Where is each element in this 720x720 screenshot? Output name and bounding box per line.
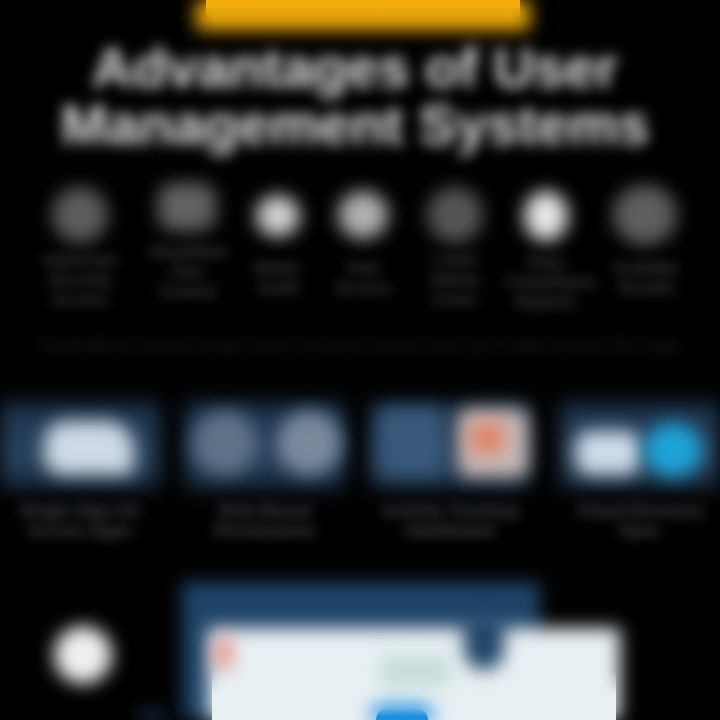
icon 7 — [613, 185, 677, 245]
icon 3 — [256, 195, 300, 237]
blue dial — [368, 704, 436, 720]
panel background — [182, 582, 540, 720]
card 4: Cloud Directory Sync — [576, 501, 704, 540]
notch — [464, 616, 504, 670]
red marker — [216, 638, 232, 668]
caption 7: Scalable Growth — [614, 260, 678, 297]
banner: yellow tag — [181, 0, 545, 46]
card 4 — [548, 390, 720, 542]
caption 2: Simplified User Control — [149, 244, 226, 301]
panel: dashboard preview — [132, 570, 636, 720]
caption 3: Better Audit — [255, 260, 301, 297]
card 3: Activity Tracking Dashboard — [382, 501, 518, 540]
card row: four features — [0, 390, 720, 543]
caption 1: Improved Security Access — [44, 252, 116, 309]
card 3 — [358, 390, 544, 542]
title: Advantages of User — [92, 36, 618, 99]
card 2: Role Based Permissions — [214, 501, 316, 540]
title: Management Systems — [61, 93, 649, 156]
icon row: seven advantages — [42, 171, 688, 312]
caption 6: Easy Compliance Reports — [506, 254, 597, 311]
card 1: Single Sign-On Across Apps — [19, 501, 141, 540]
icon 4 — [338, 191, 388, 239]
icon 1 — [52, 187, 108, 243]
icon 6 — [524, 191, 568, 241]
left accent — [138, 712, 166, 720]
blue dial bottom fill — [376, 708, 428, 720]
icon 5 — [427, 187, 483, 243]
caption 5: Lower Admin Costs — [430, 252, 480, 309]
caption 4: Fast Access — [335, 260, 391, 297]
icon: white badge — [54, 626, 112, 684]
screen bottom fill — [212, 670, 616, 720]
card 2 — [172, 390, 358, 541]
screen — [208, 628, 620, 720]
chart blob — [380, 656, 450, 686]
icon 2 — [158, 183, 216, 231]
title — [53, 36, 657, 166]
card 1 — [0, 390, 172, 543]
